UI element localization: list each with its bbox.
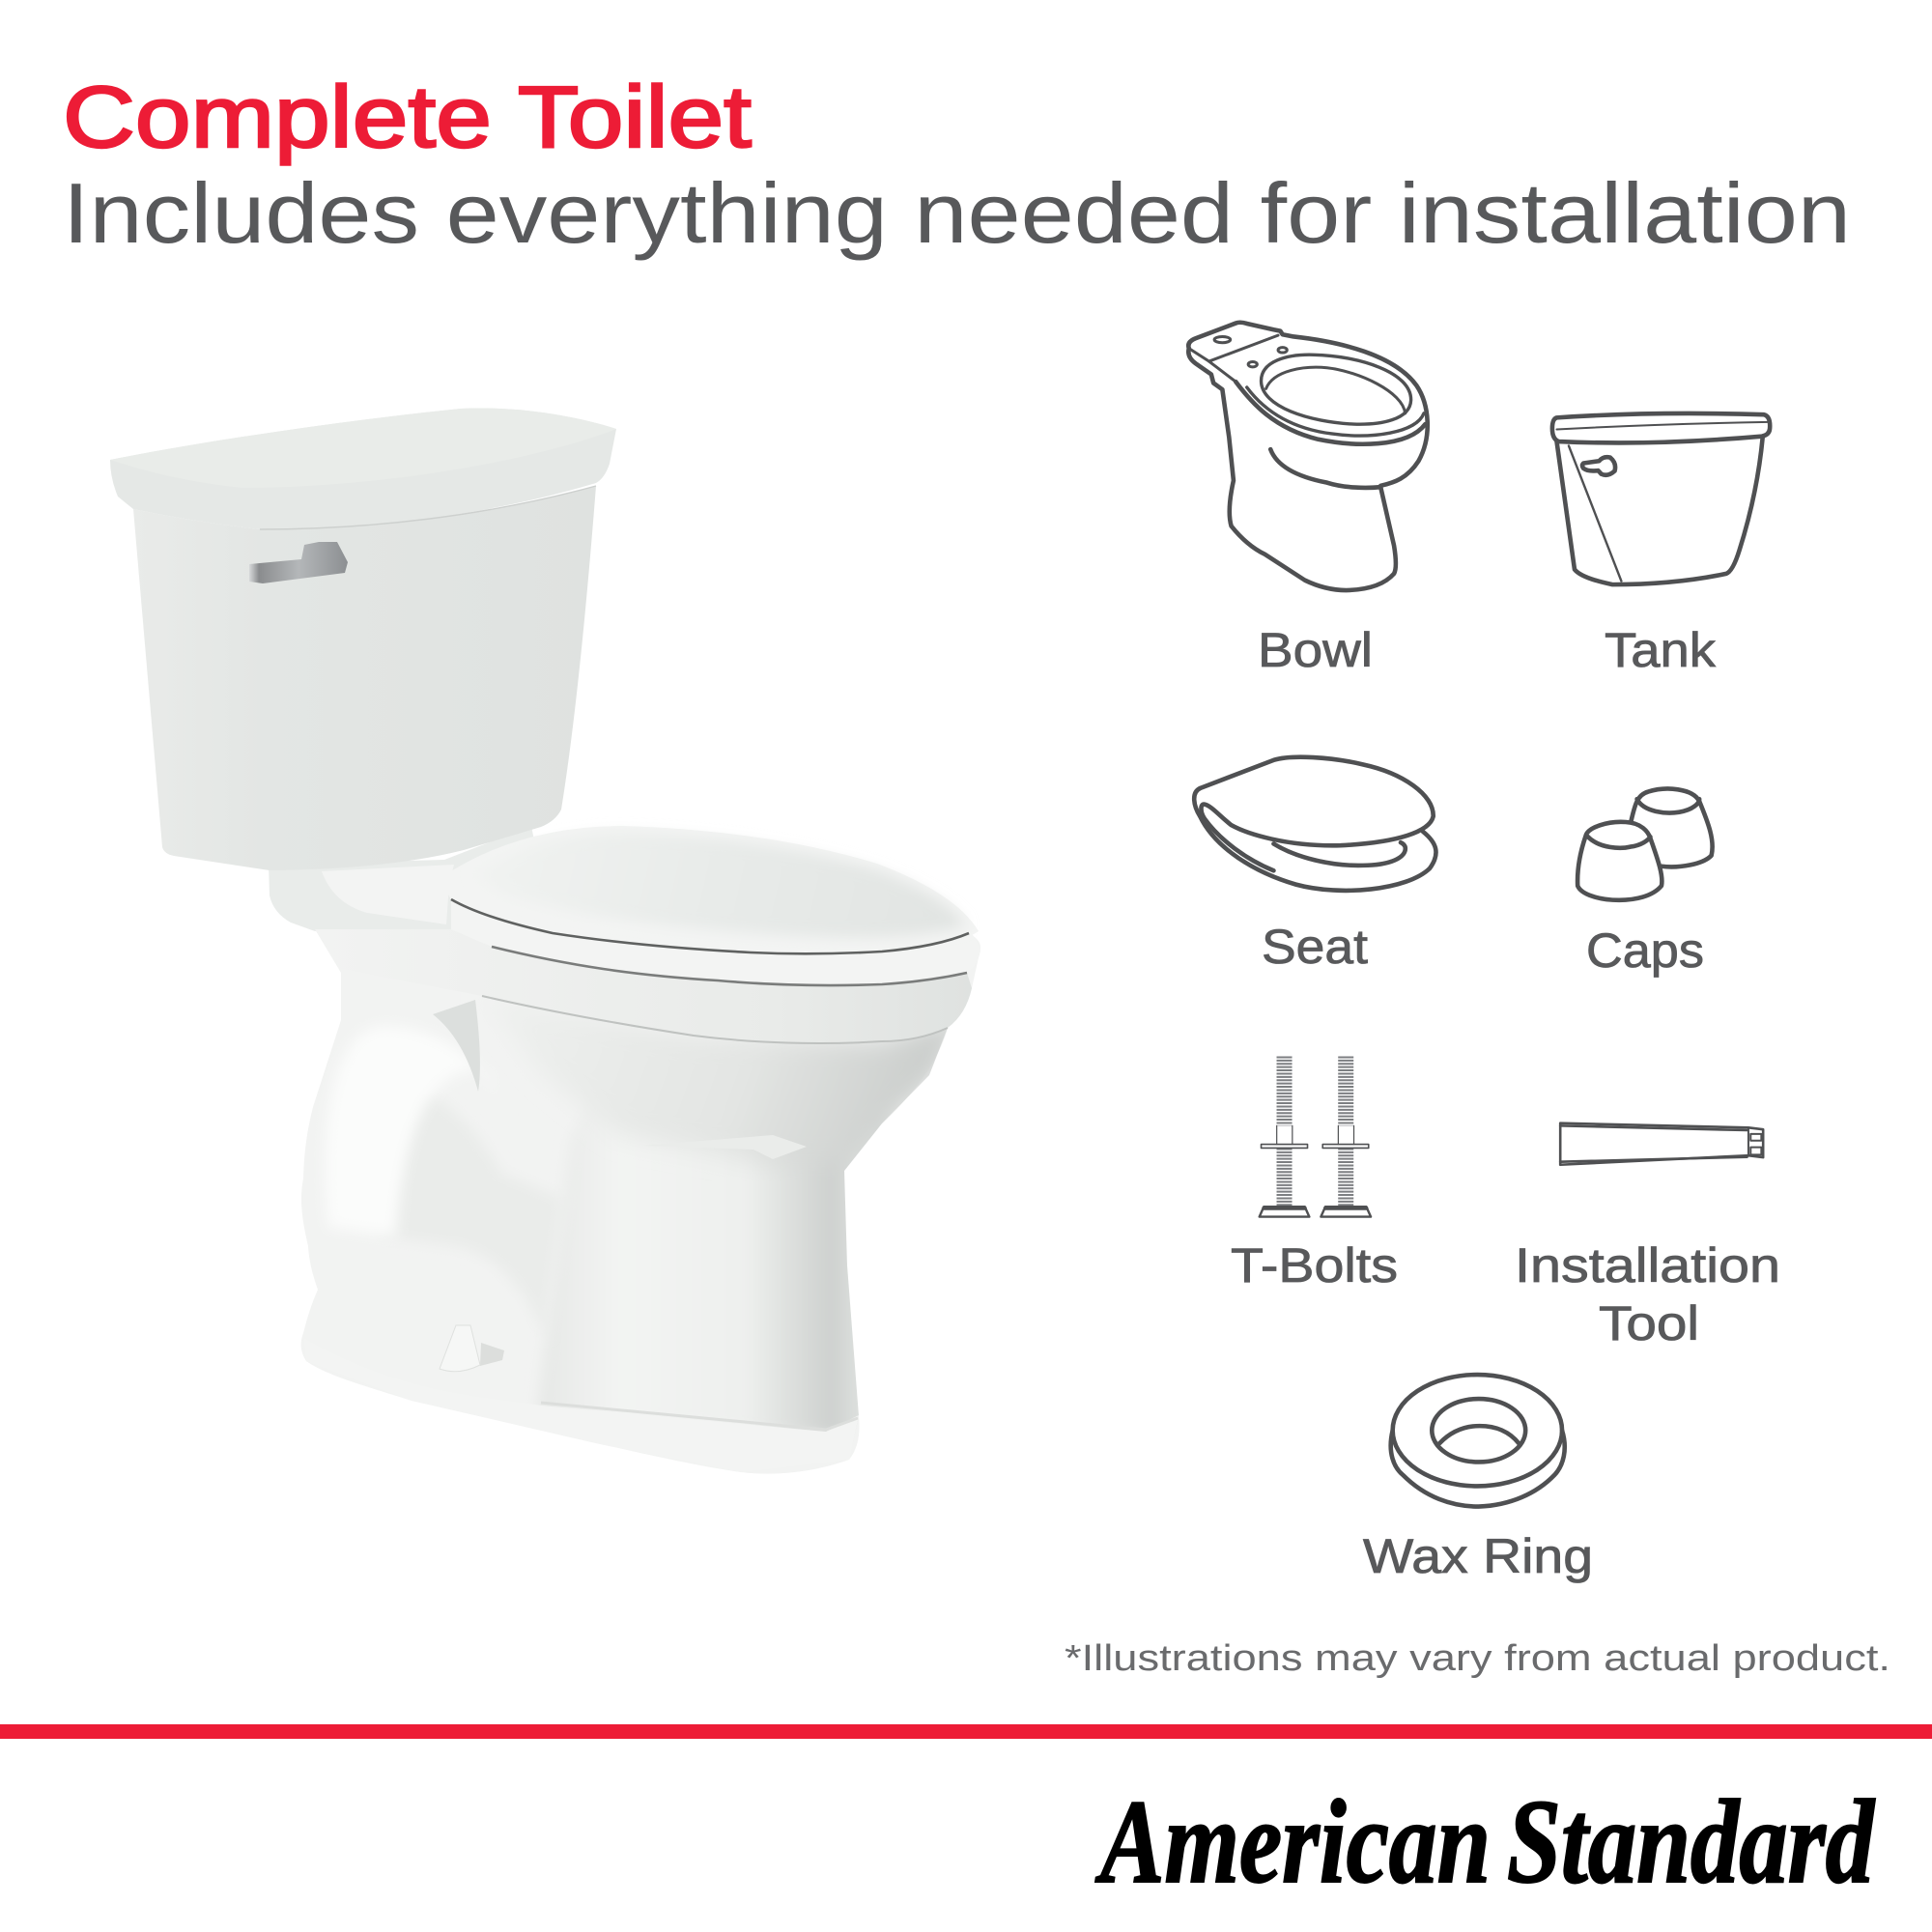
- underside shadow recess: [433, 1000, 480, 1092]
- icon: bowl: [1188, 323, 1428, 590]
- bowl highlight: [737, 1135, 806, 1159]
- title: Complete Toilet: Complete Toilet: [63, 70, 752, 166]
- lid gap line: [451, 899, 969, 953]
- label: Installation Tool: Installation: [1515, 1238, 1780, 1293]
- tank body: [133, 486, 596, 870]
- deck recess: [322, 865, 454, 924]
- parts icons, bottom rows: [1260, 1056, 1763, 1507]
- product photo: two-piece toilet: [110, 409, 980, 1478]
- pedestal: [543, 1123, 882, 1432]
- icon: seat: [1194, 757, 1436, 891]
- label: Seat: Seat: [1262, 920, 1368, 974]
- rim underside line: [482, 996, 948, 1043]
- subtitle: Includes everything needed for installation: [63, 165, 1851, 261]
- label: Bowl: Bowl: [1258, 623, 1373, 677]
- flush handle: [249, 542, 348, 583]
- bolt cap: [440, 1325, 504, 1372]
- bowl rim: [315, 929, 972, 1043]
- footnote: *Illustrations may vary from actual product.: [1065, 1638, 1890, 1679]
- icon: T-bolts: [1260, 1056, 1371, 1217]
- trapway arch highlight: [334, 1036, 456, 1233]
- red divider bar: [0, 1724, 1932, 1739]
- seat ring: [451, 899, 980, 985]
- bowl front: [582, 1030, 947, 1157]
- connector deck: [269, 826, 536, 931]
- tank lid: [110, 409, 616, 529]
- lid edge shadow: [260, 486, 596, 529]
- lid top surface: [110, 409, 616, 488]
- icon: installation tool: [1560, 1123, 1763, 1165]
- toilet bowl silhouette: [301, 911, 980, 1474]
- seat gap line: [492, 947, 967, 985]
- label: Installation Tool: [1515, 1238, 1780, 1350]
- icon: wax ring: [1391, 1375, 1565, 1507]
- inner side panel: [382, 1087, 562, 1338]
- label: Caps: Caps: [1586, 923, 1704, 978]
- label: T-Bolts: T-Bolts: [1231, 1238, 1398, 1293]
- lid top surface: [473, 833, 966, 937]
- logo: American Standard: [1094, 1776, 1876, 1908]
- label: Installation Tool: Tool: [1599, 1296, 1699, 1350]
- label: Tank: Tank: [1605, 623, 1717, 677]
- seat lid: [445, 826, 979, 953]
- icon: caps: [1577, 789, 1713, 900]
- shading clipped to body: [334, 1000, 947, 1432]
- label: Wax Ring: Wax Ring: [1363, 1529, 1593, 1583]
- parts icons, top rows: [1188, 323, 1770, 900]
- base lip: [541, 1403, 858, 1430]
- icon: tank: [1552, 413, 1770, 584]
- base band: [541, 1406, 859, 1441]
- logo: American Standard: American: [1094, 1776, 1491, 1908]
